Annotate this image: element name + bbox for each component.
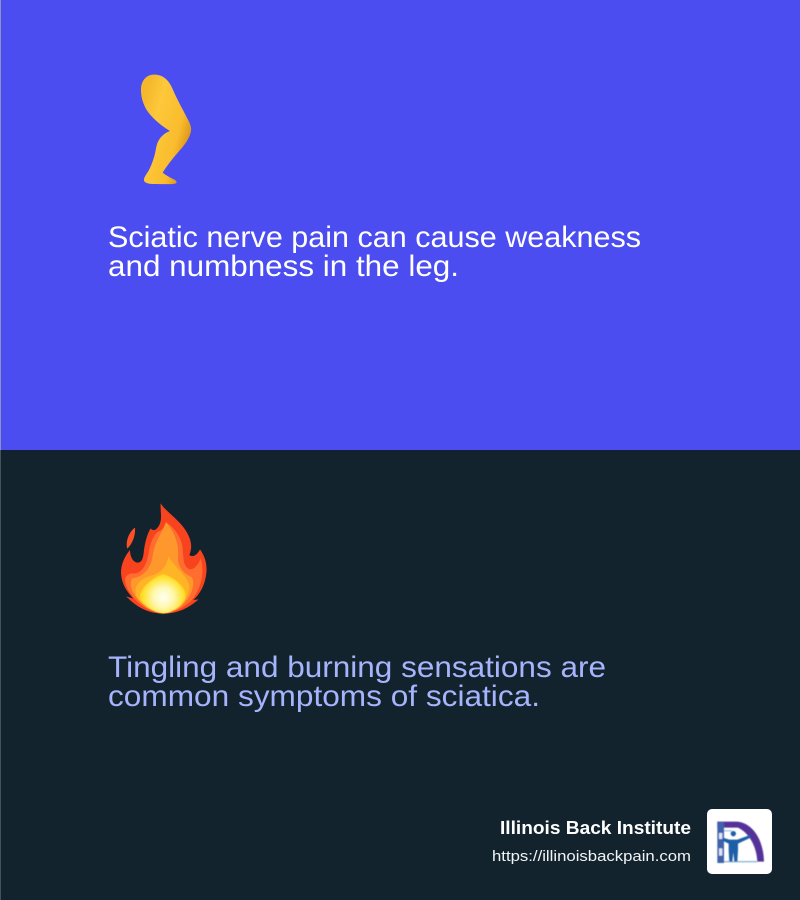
text: leg weakness statement [108, 221, 641, 283]
brand: organisation name: Illinois Back Institute [500, 818, 691, 838]
brand: website url: https://illinoisbackpain.com [492, 848, 691, 865]
icon: leg [141, 75, 191, 184]
logo: Illinois Back Institute [707, 809, 772, 874]
text: burning sensations statement: Tingling and burning sensations are [108, 651, 606, 684]
text: burning sensations statement [108, 651, 606, 713]
icon: flame [121, 503, 207, 614]
text: leg weakness statement: and numbness in the leg. [108, 250, 459, 283]
text: burning sensations statement: common symptoms of sciatica. [108, 680, 540, 713]
panel: burning sensations [0, 450, 800, 900]
text: leg weakness statement: Sciatic nerve pain can cause weakness [108, 221, 641, 254]
panel: leg weakness [0, 0, 800, 450]
